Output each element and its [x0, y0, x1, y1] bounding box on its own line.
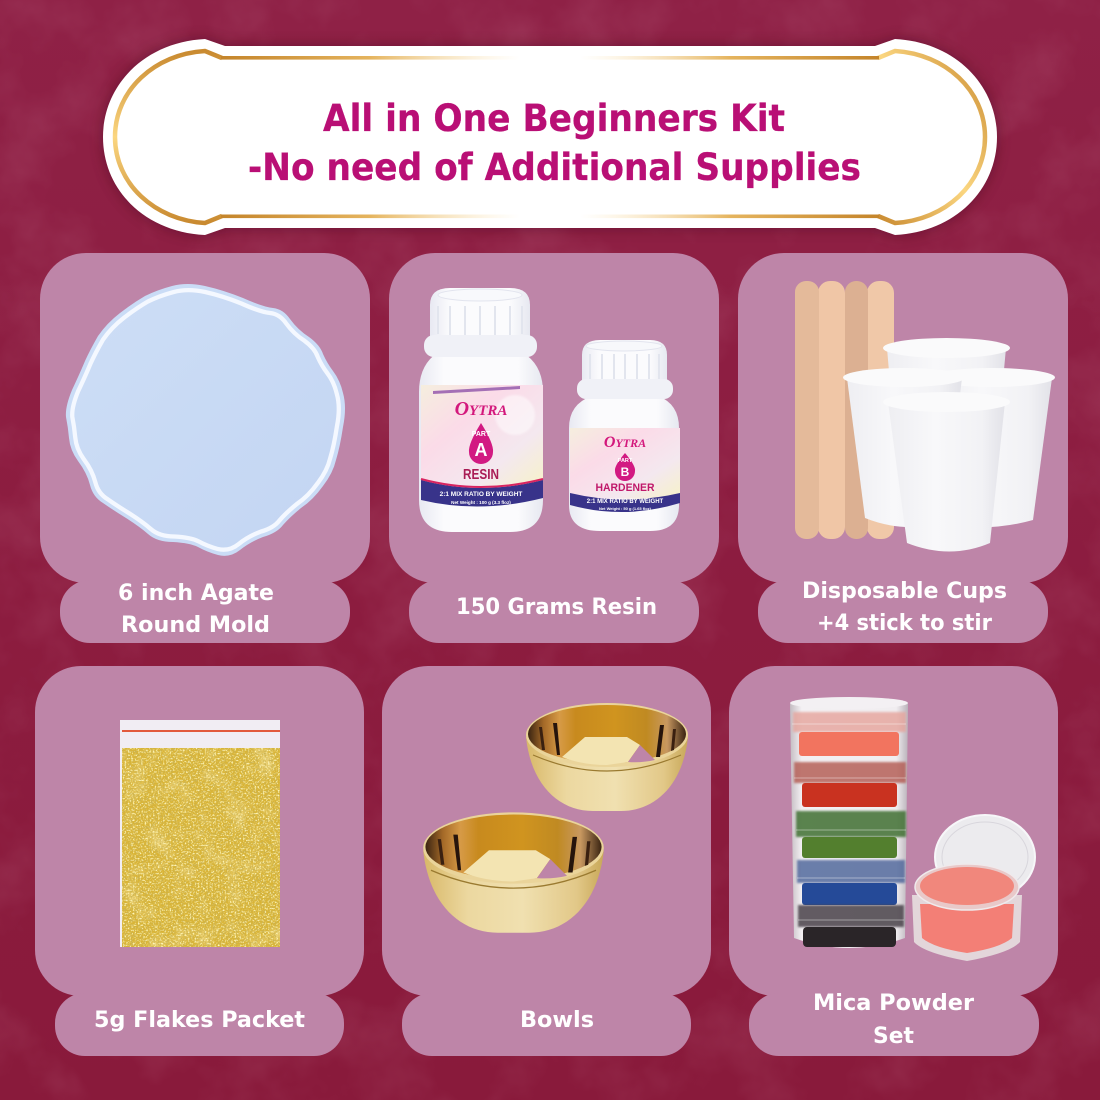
label: cups: Disposable Cups: [802, 579, 1007, 604]
label: mold: [118, 581, 274, 638]
stir sticks: [795, 281, 894, 539]
bottle: part A resin: PART: [472, 431, 491, 438]
bottle: part A resin: OYTRA: [455, 398, 507, 420]
title text: -No need of Additional Supplies: [248, 146, 861, 189]
gold flakes packet: [120, 720, 280, 947]
bottle: part A resin: A: [474, 440, 488, 460]
panel: mica powder: [729, 666, 1058, 1056]
bottle: part B hardener: 2:1 MIX RATIO BY WEIGHT: [587, 499, 664, 505]
panel: agate mold: [40, 253, 370, 643]
bottle: part A resin: RESIN: [463, 466, 499, 483]
panel: flakes packet: [35, 666, 364, 1056]
brass bowl front: [423, 812, 604, 933]
title banner: [103, 39, 997, 235]
title text: [248, 97, 861, 189]
bottle: part B hardener: B: [621, 465, 630, 479]
bottle: part B hardener: PART: [618, 458, 633, 464]
label: cups: [802, 579, 1007, 636]
label: bowls: Bowls: [520, 1008, 594, 1033]
label: mold: Round Mold: [121, 613, 270, 638]
stacked mica jars: [790, 697, 908, 948]
panel: resin bottles: [389, 253, 719, 643]
bottle: part B hardener: Net Weight : 50 g (1.65 floz): [599, 506, 652, 511]
bottle: part A resin: 2:1 MIX RATIO BY WEIGHT: [440, 491, 522, 498]
brass bowl back: [526, 703, 688, 811]
label: resin: 150 Grams Resin: [456, 595, 657, 620]
label: mica: Mica Powder: [813, 991, 974, 1016]
label: flakes: 5g Flakes Packet: [94, 1008, 305, 1033]
panel: bowls: [382, 666, 711, 1056]
open mica jar: [912, 815, 1035, 961]
label: mica: Set: [873, 1024, 914, 1049]
mold illustration: [66, 284, 345, 556]
bottle: part A resin: Net Weight : 100 g (3.3 floz): [451, 500, 511, 505]
label: cups: +4 stick to stir: [817, 611, 992, 636]
label: mica: [813, 991, 974, 1049]
title text: All in One Beginners Kit: [323, 97, 785, 140]
bottle: part B hardener: OYTRA: [604, 434, 646, 451]
bottle: part B hardener: HARDENER: [596, 482, 655, 494]
bottle: part B hardener: [569, 340, 680, 531]
paper cups: [843, 338, 1055, 552]
panel: cups and sticks: [738, 253, 1068, 643]
bottle: part A resin: [419, 288, 543, 532]
label: mold: 6 inch Agate: [118, 581, 274, 606]
